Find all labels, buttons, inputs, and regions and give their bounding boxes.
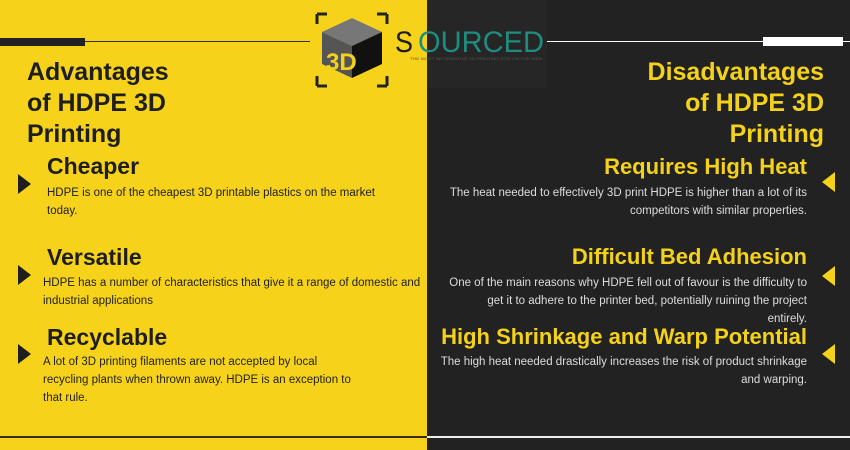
disadvantage: shrinkage (441, 324, 835, 386)
disadvantage: shrinkage: The high heat needed drastically increases the risk of product shrinkage and warping. (441, 356, 807, 386)
disadvantage: high heat: The heat needed to effectively 3D print HDPE is higher than a lot of its competitors with similar properties. (450, 187, 807, 217)
advantage: cheaper: HDPE is one of the cheapest 3D printable plastics on the market today. (47, 187, 375, 217)
left title: of HDPE 3D (27, 89, 166, 117)
logo: S (395, 26, 413, 59)
advantage: versatile (18, 244, 420, 307)
logo (316, 12, 547, 88)
advantage: versatile: Versatile (47, 244, 142, 270)
disadvantage: bed adhesion: One of the main reasons why HDPE fell out of favour is the difficulty to get it to adhere to the printer bed, potentially ruining the project entirely. (449, 277, 807, 325)
advantage: cheaper: Cheaper (47, 153, 139, 179)
left panel (0, 0, 427, 450)
logo: OURCED (418, 26, 544, 59)
disadvantage: bed adhesion (449, 244, 835, 325)
advantage: recyclable (18, 324, 351, 404)
disadvantage: bed adhesion: Difficult Bed Adhesion (572, 244, 807, 269)
logo: 3D (326, 49, 357, 76)
right title: of HDPE 3D (685, 89, 824, 117)
advantage: versatile: HDPE has a number of characteristics that give it a range of domestic and industrial applications (43, 277, 420, 307)
right panel (427, 0, 850, 450)
disadvantage: shrinkage: High Shrinkage and Warp Potential (441, 324, 807, 349)
advantage: recyclable: Recyclable (47, 324, 167, 350)
left title: Printing (27, 120, 121, 148)
logo: THE MOST INFORMATIVE 3D PRINTING SITE ON THE WEB (410, 56, 542, 61)
left title (27, 58, 169, 148)
advantage: recyclable: A lot of 3D printing filaments are not accepted by local recycling plants when thrown away. HDPE is an exception to that rule. (43, 356, 351, 404)
right title: Disadvantages (648, 58, 824, 86)
disadvantage: high heat: Requires High Heat (604, 154, 807, 179)
right title (648, 58, 824, 148)
disadvantage: high heat (450, 154, 835, 217)
right title: Printing (730, 120, 824, 148)
left title: Advantages (27, 58, 169, 86)
advantage: cheaper (18, 153, 375, 217)
